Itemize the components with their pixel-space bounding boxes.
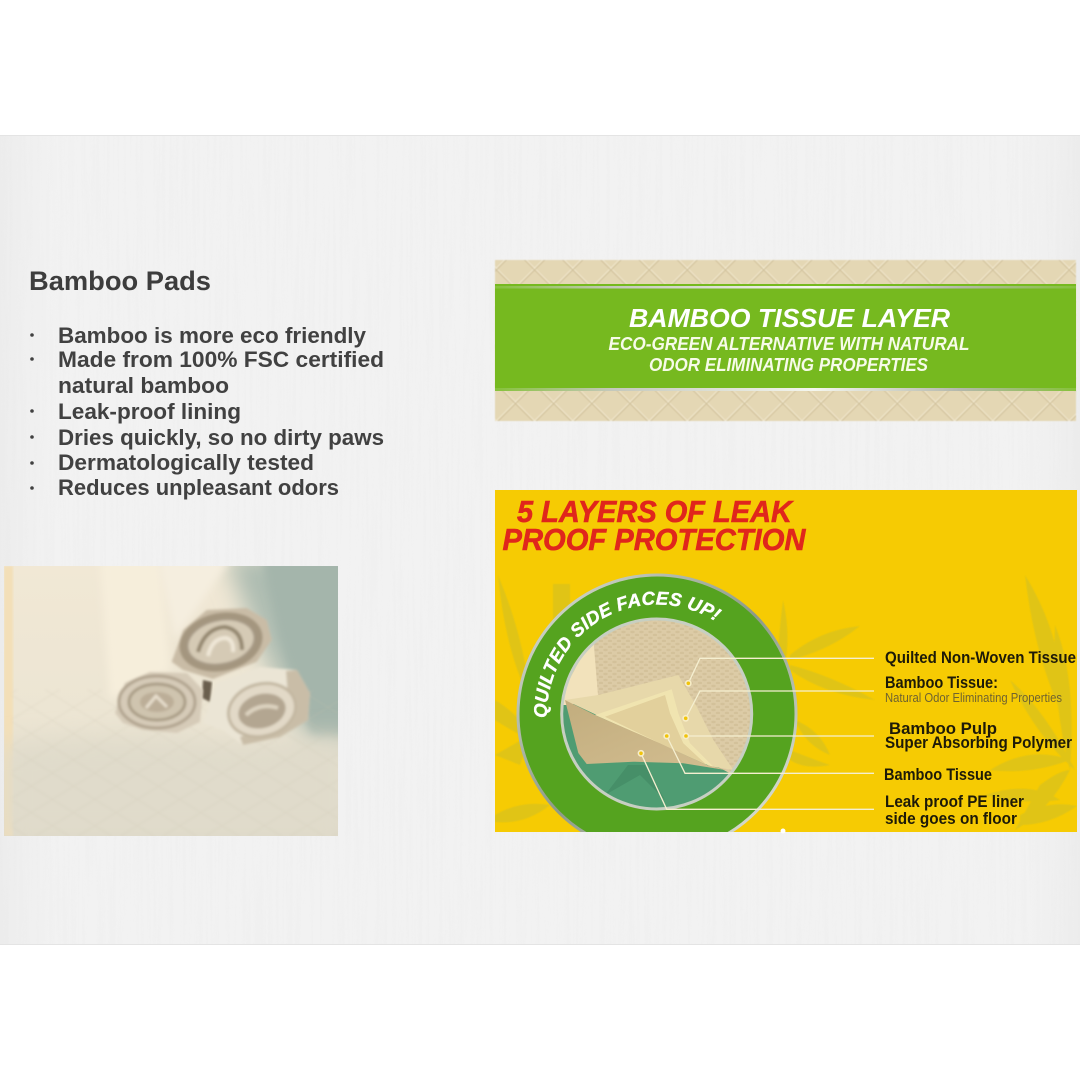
headline: PROOF PROTECTION bbox=[502, 522, 806, 557]
silver rule bottom bbox=[495, 388, 1076, 391]
top quilted layer bbox=[570, 620, 750, 773]
teal sheet at back bbox=[221, 566, 338, 748]
bamboo leaves background bbox=[495, 575, 1077, 830]
headline bbox=[502, 500, 806, 550]
panel: bamboo tissue layer banner bbox=[495, 260, 1076, 421]
banner subtitle bbox=[608, 333, 970, 375]
banner title: BAMBOO TISSUE LAYER bbox=[629, 303, 950, 333]
bullet: FSC certified: natural bamboo bbox=[58, 373, 229, 398]
teal leaf shadows bbox=[605, 765, 665, 800]
teal floor bbox=[563, 704, 729, 808]
layers cutaway bbox=[560, 618, 754, 810]
bullet: leak-proof: Leak-proof lining bbox=[58, 399, 241, 424]
photo: rolled bamboo pads bbox=[4, 556, 350, 840]
cream sheet bbox=[605, 695, 707, 765]
lighter folded strip bbox=[564, 645, 598, 705]
leader lines bbox=[641, 658, 874, 809]
headline: 5 LAYERS OF LEAK bbox=[517, 494, 794, 529]
silver rule top bbox=[495, 286, 1076, 288]
bullet: reduces odors: Reduces unpleasant odors bbox=[58, 475, 339, 500]
bullet: eco friendly: Bamboo is more eco friendly bbox=[58, 323, 366, 348]
banner subtitle: ODOR ELIMINATING PROPERTIES bbox=[649, 354, 929, 375]
label: PE liner: side goes on floor bbox=[885, 810, 1018, 828]
label: pulp and polymer: Bamboo Pulp bbox=[889, 720, 997, 738]
leader dots bbox=[638, 681, 691, 756]
ring caption: QUILTED SIDE FACES UP! bbox=[534, 592, 722, 718]
cream sheet folds bbox=[113, 654, 164, 692]
slide infographic bbox=[0, 135, 1080, 945]
textured slide background band bbox=[0, 135, 1080, 945]
bullet: dermatologically tested: Dermatologically tested bbox=[58, 450, 314, 475]
label: PE liner: Leak proof PE liner bbox=[885, 793, 1025, 811]
label: pulp and polymer bbox=[885, 720, 1073, 752]
label: PE liner bbox=[885, 793, 1025, 828]
peeled tan back bbox=[565, 700, 730, 771]
label: bamboo tissue odor bbox=[885, 674, 1062, 705]
bullet: dries quickly: Dries quickly, so no dirty paws bbox=[58, 425, 384, 450]
cream sheet edge bbox=[595, 689, 715, 768]
bullet: FSC certified: Made from 100% FSC certified bbox=[58, 347, 384, 372]
bullet: FSC certified bbox=[30, 347, 384, 398]
roll right bbox=[203, 667, 310, 745]
roll left bbox=[115, 672, 203, 733]
heading: Bamboo Pads: Bamboo Pads bbox=[29, 266, 211, 296]
layer labels bbox=[884, 649, 1076, 828]
roll shadow gap bbox=[202, 680, 212, 702]
green band bbox=[495, 284, 1076, 388]
label: bamboo tissue: Bamboo Tissue bbox=[884, 766, 992, 784]
panel: 5 layers of leak proof protection bbox=[495, 490, 1077, 832]
quilted tan strip background bbox=[495, 260, 1076, 421]
bullet list bbox=[30, 323, 384, 500]
quilted foreground bbox=[4, 735, 345, 840]
roll top bbox=[172, 605, 272, 679]
banner subtitle: ECO-GREEN ALTERNATIVE WITH NATURAL bbox=[608, 333, 970, 354]
green ring bbox=[516, 574, 798, 832]
label: bamboo tissue odor: Bamboo Tissue: bbox=[885, 674, 998, 692]
bamboo tissue textured edge bbox=[565, 675, 733, 770]
